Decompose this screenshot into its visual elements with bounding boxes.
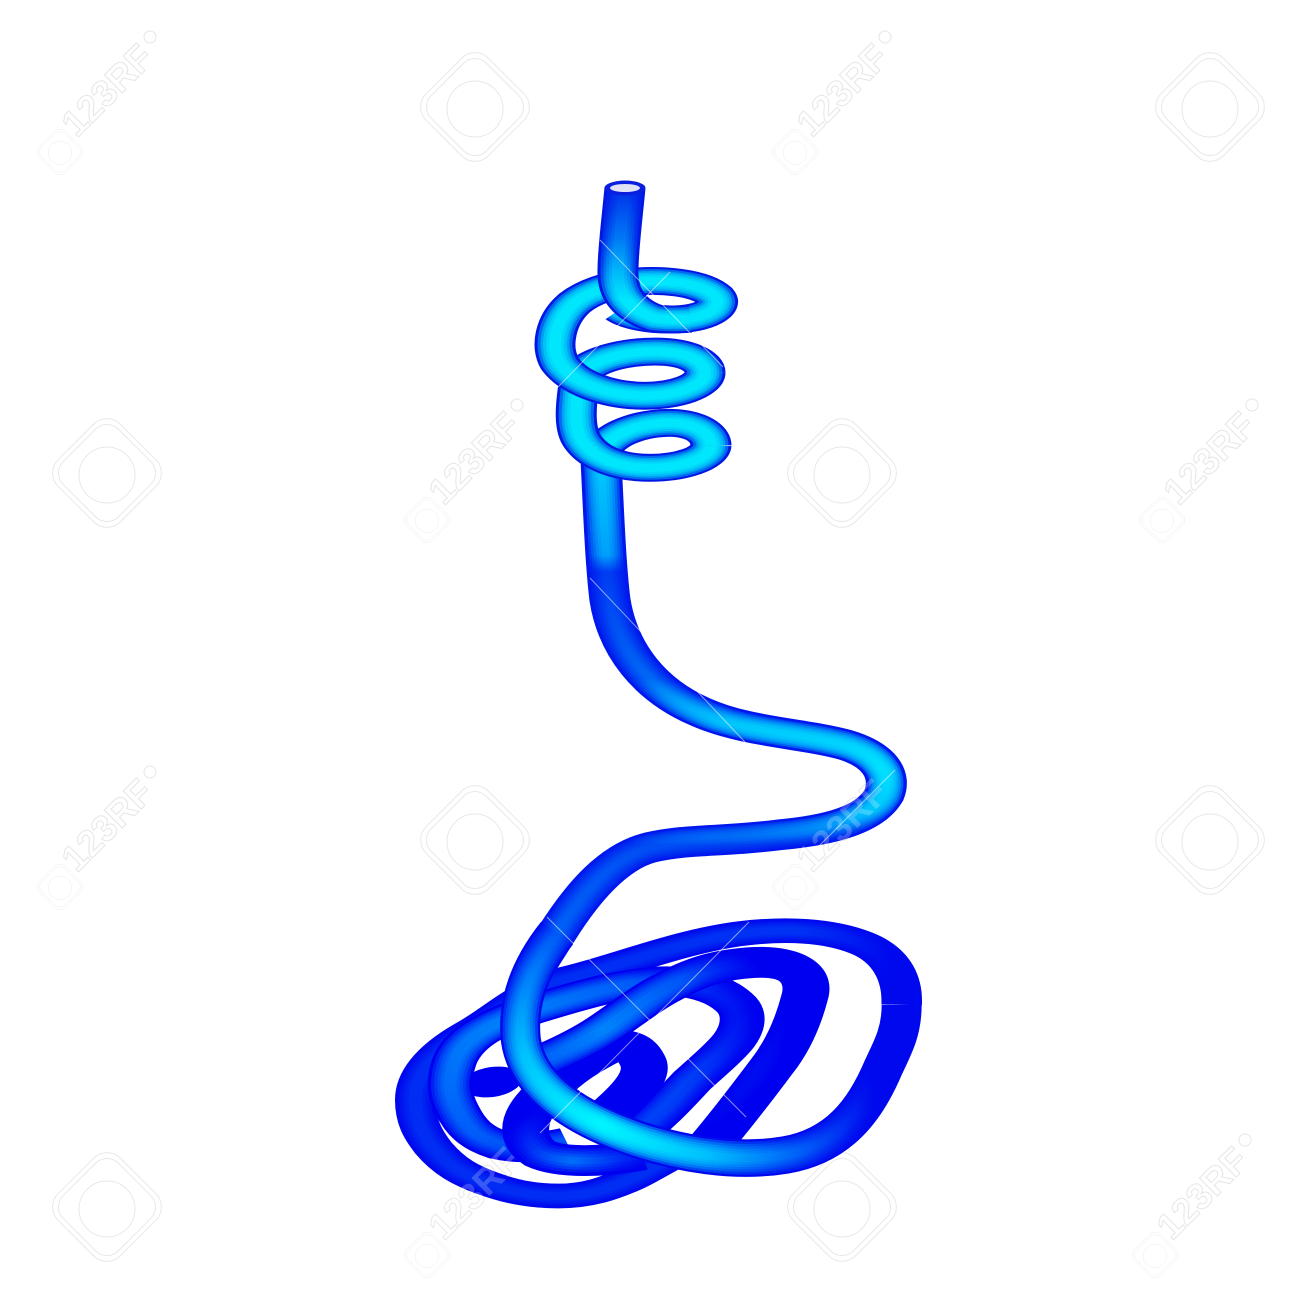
- watermark: row 3 logo: [34, 766, 161, 913]
- tube: diagonal loop: [524, 962, 806, 1162]
- watermark: row 2 logo: [401, 399, 528, 546]
- watermark: row 3 logo right: 123RF: [789, 772, 896, 879]
- tube: long neck with S-bend: [538, 440, 886, 963]
- watermark: fine white crosshair lines over the tube: [540, 240, 895, 1133]
- tube: bright front sweep of lower tangle: [520, 933, 902, 1158]
- watermark: row 4 camera: [45, 1145, 169, 1269]
- tube opening at top: [604, 180, 646, 196]
- watermark: row 2 camera centre: [780, 411, 904, 535]
- watermark: row 1 logo right: [769, 31, 896, 178]
- tube: back outer ring of lower tangle: [415, 931, 902, 1196]
- coil: middle turn back arc: [583, 352, 705, 373]
- coil: bottom turn back arc: [600, 423, 711, 452]
- coil: middle turn front arc: [555, 282, 705, 396]
- watermark: row 1 camera: [413, 45, 537, 169]
- watermark: row 2 camera: [45, 411, 169, 535]
- watermark: row 2 logo right: 123RF: [1156, 405, 1263, 512]
- tube: innermost loop: [526, 1046, 644, 1161]
- watermark: row 3 camera right: [1148, 778, 1272, 902]
- watermark: logo text showing over the lower tangle: 123RF: [421, 1140, 528, 1247]
- watermark: row 2 logo right: [1136, 399, 1263, 546]
- tube: second inner loop: [450, 981, 742, 1147]
- tube: top stem: [618, 188, 690, 319]
- watermark: row 2 logo: 123RF: [421, 405, 528, 512]
- coil: top turn: [620, 281, 718, 320]
- watermark: logo text showing over the S-bend: 123RF: [789, 772, 896, 879]
- watermark: row 4 logo right: 123RF: [1149, 1140, 1256, 1247]
- watermark: row 3 logo: 123RF: [54, 772, 161, 879]
- watermark: row 1 logo left: [34, 31, 161, 178]
- watermark: row 4 logo: [401, 1134, 528, 1281]
- watermark: row 1 logo left: 123RF: [54, 37, 161, 144]
- coil: bottom turn front arc: [576, 377, 711, 468]
- watermark: row 4 logo right: [1129, 1134, 1256, 1281]
- watermark: row 1 logo right: 123RF: [789, 37, 896, 144]
- watermark: row 3 logo right: [769, 766, 896, 913]
- watermark: row 3 camera: [413, 778, 537, 902]
- watermark: row 4 camera centre: [780, 1145, 904, 1269]
- watermark: row 1 camera right: [1148, 45, 1272, 169]
- watermark: row 4 logo: 123RF: [421, 1140, 528, 1247]
- tube: dark blob at left of tangle: [460, 1063, 524, 1101]
